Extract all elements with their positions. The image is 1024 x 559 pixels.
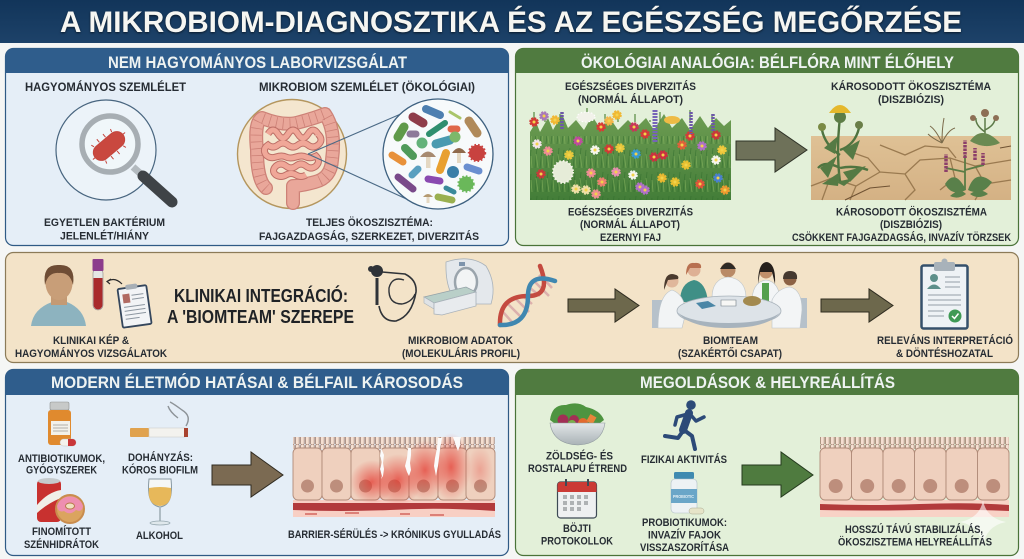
panel: klinikai integráció <box>6 252 1018 362</box>
panel heading: ÖKOLÓGIAI ANALÓGIA: BÉLFLÓRA MINT ÉLŐHELY <box>581 53 955 72</box>
icon: runner <box>665 400 704 449</box>
arrow: lifestyle to damage <box>212 452 283 497</box>
icon: report clipboard with check <box>922 258 968 328</box>
icon: probiotic bottle: PROBIOTIC <box>673 494 695 499</box>
arrow: small curved <box>107 279 122 284</box>
panel heading bar <box>6 370 508 395</box>
zoom lines <box>308 107 417 202</box>
caption: carbohydrates: SZÉNHIDRÁTOK <box>24 538 99 551</box>
caption: molecular profile: (MOLEKULÁRIS PROFIL) <box>402 347 520 360</box>
caption: clinical picture: KLINIKAI KÉP & <box>53 334 129 347</box>
icon: patient record clipboard <box>117 282 152 328</box>
panel heading bar <box>6 48 508 73</box>
icon: DNA helix <box>500 265 556 325</box>
panel: nem hagyományos laborvizsgálat <box>6 48 508 246</box>
icon: wine glass <box>148 479 172 525</box>
panel heading: NEM HAGYOMÁNYOS LABORVIZSGÁLAT <box>108 53 408 72</box>
caption: vegetable: ZÖLDSÉG- ÉS <box>546 450 613 462</box>
arrow: solutions to healing <box>742 452 813 497</box>
caption: fibre diet: ROSTALAPU ÉTREND <box>528 462 627 475</box>
caption: refined: FINOMÍTOTT <box>32 525 91 538</box>
icon: patient <box>31 265 86 326</box>
heading: biomteam role: A 'BIOMTEAM' SZEREPE <box>167 307 354 327</box>
caption: long-term stabilisation: HOSSZÚ TÁVÚ STABILIZÁLÁS, <box>845 523 983 536</box>
caption: microbiome data: MIKROBIOM ADATOK <box>408 335 513 347</box>
caption: dysbiosis: (DISZBIÓZIS) <box>880 218 942 231</box>
caption: protocols: PROTOKOLLOK <box>541 536 613 548</box>
caption: diversity: FAJGAZDAGSÁG, SZERKEZET, DIVERZITÁS <box>259 230 479 243</box>
heading: clinical integration: KLINIKAI INTEGRÁCIÓ: <box>174 285 348 306</box>
label: normal state: (NORMÁL ÁLLAPOT) <box>578 93 683 106</box>
icon: probiotic bottle <box>671 472 704 514</box>
caption: thousands of species: EZERNYI FAJ <box>600 232 661 244</box>
caption: traditional tests: HAGYOMÁNYOS VIZSGÁLATOK <box>15 347 167 360</box>
arrow: team to decision <box>821 289 893 322</box>
caption: invasive species: INVAZÍV FAJOK <box>648 528 721 542</box>
panel: megoldások <box>516 370 1018 556</box>
icon: blood tube <box>92 259 104 310</box>
decorative sparkle mark <box>960 500 1006 546</box>
icon: soda can and donut <box>37 478 84 523</box>
caption: harmful biofilm: KÓROS BIOFILM <box>122 464 198 476</box>
caption: decision making: & DÖNTÉSHOZATAL <box>896 347 993 360</box>
caption: healthy diversity: EGÉSZSÉGES DIVERZITÁS <box>568 206 693 218</box>
caption: antibiotics: ANTIBIOTIKUMOK, <box>18 453 105 465</box>
panel heading: MODERN ÉLETMÓD HATÁSAI & BÉLFAIL KÁROSODÁS <box>51 373 463 392</box>
subheading: traditional view: HAGYOMÁNYOS SZEMLÉLET <box>25 79 187 94</box>
illustration: healthy epithelium <box>820 437 1009 517</box>
caption: full ecosystem: TELJES ÖKOSZISZTÉMA: <box>306 216 433 229</box>
illustration: flowering meadow <box>530 108 731 200</box>
icon: MRI scanner <box>424 259 493 315</box>
caption: suppression: VISSZASZORÍTÁSA <box>640 541 729 554</box>
arrow: data to team <box>568 289 639 322</box>
caption: damaged ecosystem: KÁROSODOTT ÖKOSZISZTÉMA <box>836 206 987 218</box>
icon: calendar <box>558 479 596 518</box>
panel heading bar <box>516 370 1018 395</box>
caption: medicines: GYÓGYSZEREK <box>26 464 97 476</box>
panel heading: MEGOLDÁSOK & HELYREÁLLÍTÁS <box>640 373 895 392</box>
title banner <box>0 0 1024 43</box>
caption: biomteam: BIOMTEAM <box>703 335 758 347</box>
caption: presence absence: JELENLÉT/HIÁNY <box>60 230 150 242</box>
icon: endoscope <box>368 266 416 321</box>
icon: cigarette with smoke <box>130 402 188 437</box>
icon: diverse microbiome circle <box>383 99 493 209</box>
panel: modern életmód <box>6 370 508 556</box>
subheading: microbiome view: MIKROBIOM SZEMLÉLET (ÖKOLÓGIAI) <box>259 79 475 94</box>
caption: physical activity: FIZIKAI AKTIVITÁS <box>641 453 727 466</box>
icon: pill bottle <box>48 402 76 446</box>
icon: magnifier over a single bacterium <box>56 100 172 202</box>
caption: alcohol: ALKOHOL <box>136 530 183 542</box>
caption: barrier damage to chronic inflammation: BARRIER-SÉRÜLÉS -> KRÓNIKUS GYULLADÁS <box>288 528 501 541</box>
caption: probiotics: PROBIOTIKUMOK: <box>642 517 727 529</box>
title banner: A MIKROBIOM-DIAGNOSZTIKA ÉS AZ EGÉSZSÉG MEGŐRZÉSE <box>60 5 962 39</box>
illustration: damaged epithelium <box>293 433 495 517</box>
caption: single bacterium: EGYETLEN BAKTÉRIUM <box>44 216 165 229</box>
caption: fasting: BÖJTI <box>563 522 591 535</box>
icon: salad bowl <box>550 403 605 445</box>
caption: smoking: DOHÁNYZÁS: <box>128 451 193 464</box>
caption: normal state: (NORMÁL ÁLLAPOT) <box>580 218 680 231</box>
illustration: dry cracked soil with weeds <box>811 106 1011 200</box>
label: healthy diversity: EGÉSZSÉGES DIVERZITÁS <box>565 80 696 93</box>
label: damaged ecosystem: KÁROSODOTT ÖKOSZISZTÉMA <box>831 80 991 93</box>
label: dysbiosis: (DISZBIÓZIS) <box>878 93 944 106</box>
panel heading bar <box>516 48 1018 73</box>
illustration: biomteam around a table <box>652 262 807 328</box>
icon: intestine in a circle <box>238 100 346 208</box>
caption: expert team: (SZAKÉRTŐI CSAPAT) <box>678 347 782 360</box>
arrow: healthy to damaged <box>736 128 807 172</box>
caption: ecosystem restoration: ÖKOSZISZTEMA HELYREÁLLÍTÁS <box>838 536 992 548</box>
panel: ökológiai analógia <box>516 48 1018 246</box>
